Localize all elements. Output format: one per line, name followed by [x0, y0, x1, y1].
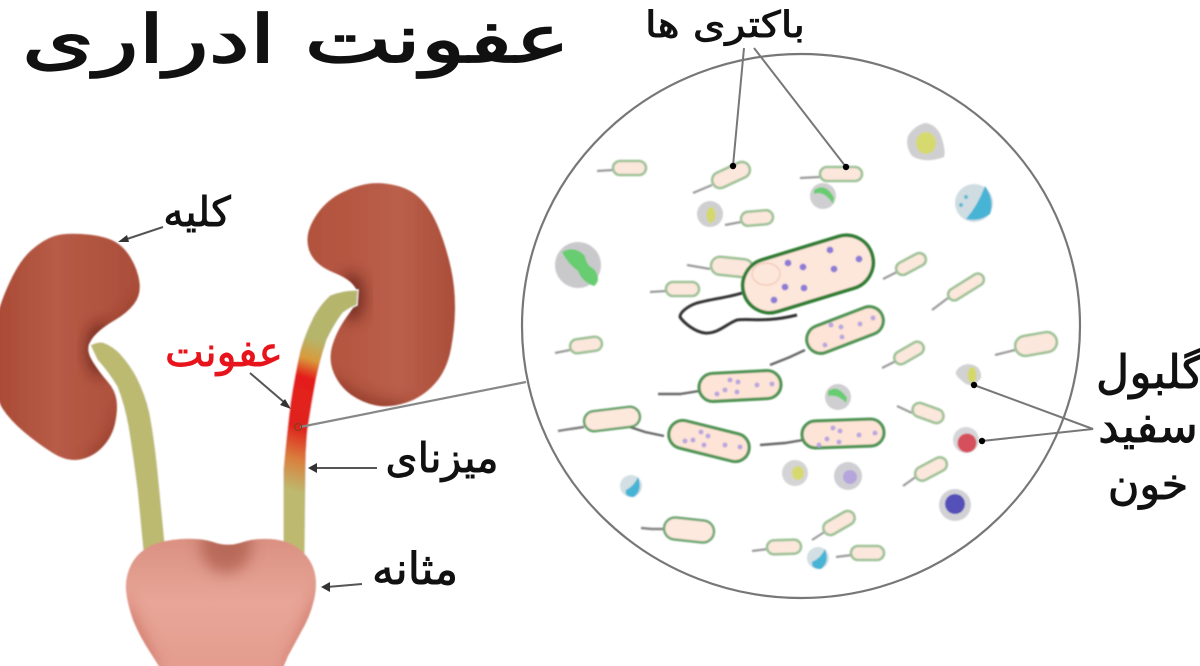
bladder: [125, 538, 317, 666]
connector line from ureter to circle: [294, 382, 526, 430]
label: white blood cells: سفید: [1098, 399, 1198, 453]
right ureter with infection: [283, 290, 358, 555]
urinary tract anatomy: [0, 175, 460, 666]
white blood cells: [555, 123, 993, 569]
label: white blood cells: [1096, 345, 1200, 510]
label: infection: عفونت: [165, 328, 283, 376]
cell: navy: [939, 489, 971, 521]
cell: yellow labelled: [956, 364, 981, 385]
arrow: infection: [250, 373, 291, 409]
large bacterium with flagellum: [680, 229, 880, 333]
arrow: kidney: [118, 227, 163, 242]
arrow: ureter: [308, 463, 377, 473]
cell: purple: [834, 462, 862, 490]
leader lines: bacteria: [730, 48, 849, 170]
small bacteria: [555, 159, 1058, 560]
medium bacteria: [558, 303, 887, 544]
label: bladder: مثانه: [372, 544, 458, 595]
cell: blue bottom: [807, 547, 829, 569]
label: bacteria: باکتری ها: [645, 5, 805, 46]
label: white blood cells: خون: [1108, 460, 1188, 510]
arrow: bladder: [321, 582, 362, 592]
label: ureter: میزنای: [386, 434, 498, 482]
cell: red labelled: [953, 427, 979, 453]
label: kidney: کلیه: [163, 188, 231, 236]
left ureter: [90, 342, 165, 552]
title: عفونت ادراری: [22, 1, 570, 78]
cell: large green: [555, 242, 601, 288]
left kidney: [0, 232, 141, 461]
right kidney: [306, 182, 456, 408]
cell: blue lower left: [620, 475, 642, 497]
cell: yellow upper right: [907, 123, 945, 160]
cell: green top: [810, 183, 836, 209]
cell: green lower: [825, 384, 851, 410]
cell: blue upper right: [955, 184, 993, 222]
magnified view circle: [522, 54, 1080, 598]
cell: yellow lower: [782, 460, 808, 486]
leader lines: white blood cells: [971, 382, 1093, 444]
bacteria: [555, 123, 1058, 569]
cell: yellow top: [697, 201, 723, 227]
